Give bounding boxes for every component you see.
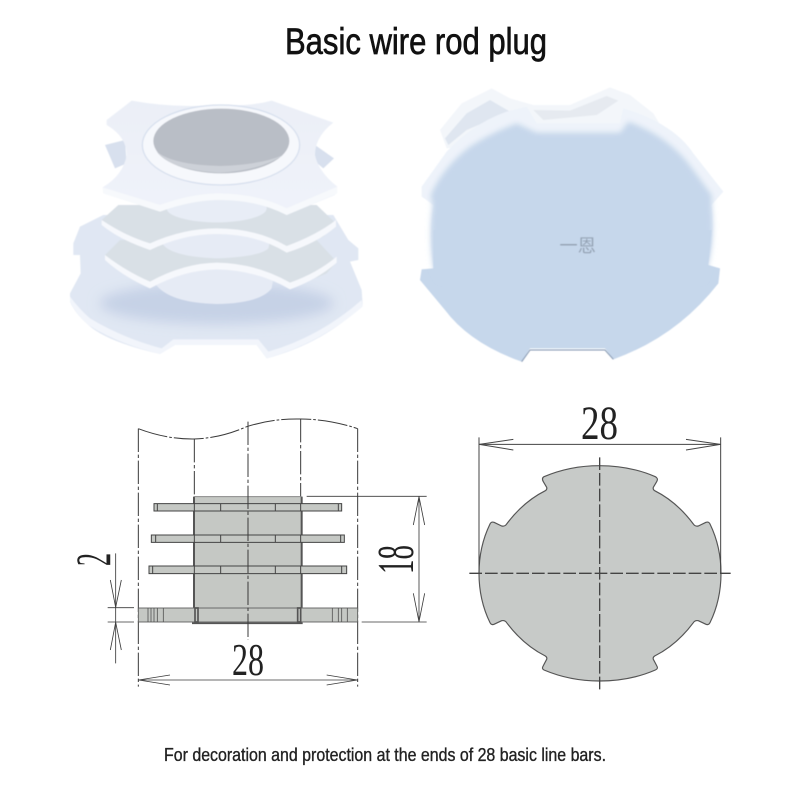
disc lower edge	[420, 230, 720, 362]
bottom disc	[420, 107, 723, 362]
dimension: 28	[138, 675, 358, 685]
drawing: end view	[469, 437, 731, 689]
label: 28 width: 28	[232, 634, 264, 685]
axis	[246, 422, 249, 640]
base flange	[70, 215, 363, 358]
bore	[153, 109, 289, 173]
flange	[138, 608, 358, 623]
embossed mark: 一恩	[559, 236, 596, 256]
label: 2 thickness: 2	[65, 553, 121, 566]
upper collar	[167, 194, 267, 222]
dimension: 18	[307, 496, 427, 622]
fins	[149, 504, 347, 574]
centre lines	[138, 419, 358, 687]
photo: plug underside view	[420, 87, 723, 362]
label: 18 height: 18	[368, 545, 425, 574]
body	[194, 497, 302, 608]
bottom notch edge	[522, 350, 613, 362]
drawing: side elevation	[108, 419, 427, 687]
break line	[138, 419, 358, 439]
dimension: 28	[479, 437, 721, 573]
disc soft shading	[431, 122, 713, 280]
lower fin and collar	[105, 240, 337, 304]
caption: For decoration and protection at the ends of 28 basic line bars.	[164, 744, 606, 765]
title: Basic wire rod plug	[285, 20, 547, 62]
stacked fins behind	[440, 87, 663, 148]
label: 28 diameter: 28	[581, 397, 618, 450]
centre lines	[469, 571, 731, 575]
rear tabs of top flange	[105, 140, 334, 168]
top flange	[103, 101, 337, 215]
dimension: 2	[108, 553, 134, 663]
middle fin and collar	[102, 205, 336, 258]
photo: plug side view	[70, 101, 363, 358]
disc outline	[479, 466, 721, 681]
collar rim	[142, 105, 300, 185]
